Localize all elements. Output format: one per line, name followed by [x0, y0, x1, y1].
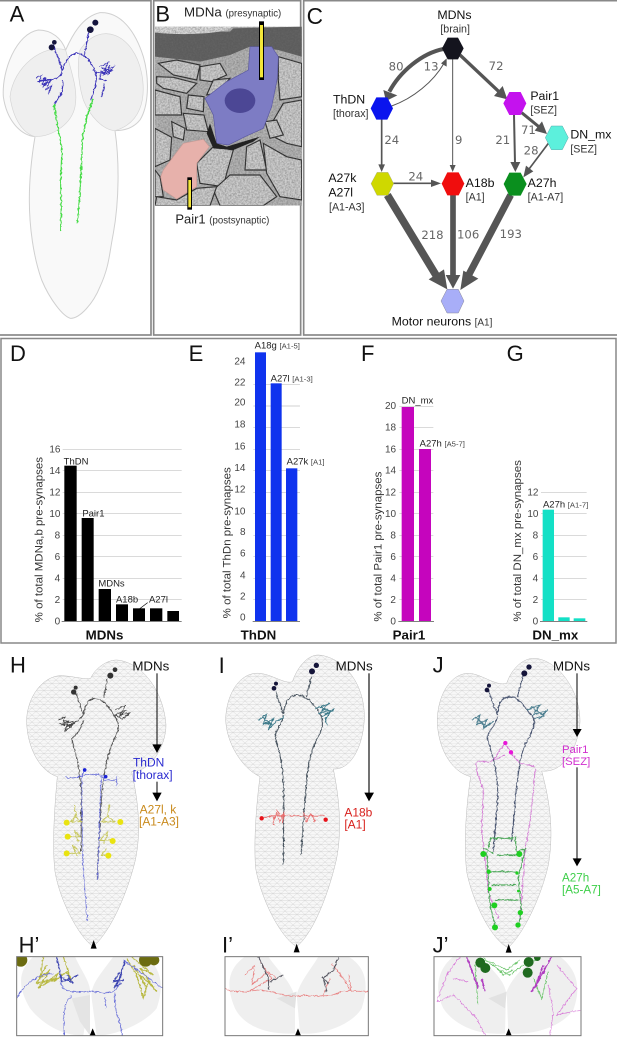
edge weights: 72	[489, 59, 504, 73]
edge: ThDN to A27k	[378, 119, 385, 172]
chart D: MDNs: D	[10, 341, 26, 366]
panel: J Pair1 and A27h pathway	[433, 652, 601, 1036]
node: A27k, A27l: A27k	[328, 171, 357, 185]
label: ThDN: [thorax]	[133, 768, 173, 782]
inset I'	[225, 957, 368, 1036]
chart D: MDNs: A27l	[149, 595, 168, 606]
arrow: ThDN to A27l,k	[152, 782, 162, 801]
nerve cord mesh	[437, 658, 580, 948]
A18b somata	[259, 816, 328, 822]
label: Pair1: [SEZ]	[562, 756, 590, 768]
heading: C: C	[307, 3, 323, 29]
chart G: DN_mx: A27h [A1-7]	[543, 499, 588, 510]
inset J'	[434, 954, 581, 1036]
label: A27h	[562, 872, 601, 897]
node: Pair1: Pair1	[530, 89, 559, 103]
nerve cord outline	[3, 13, 147, 318]
MDN cell bodies	[49, 20, 98, 50]
ThDN neuron (blue)	[65, 770, 117, 921]
MDN neuron: green axons	[54, 98, 93, 232]
node: Motor neurons	[392, 289, 493, 329]
dendrite tufts	[58, 706, 131, 731]
A18b neuron (red)	[262, 810, 325, 825]
panel: A whole-nerve-cord MDN morphology	[0, 1, 151, 335]
chart G: DN_mx	[507, 341, 588, 642]
arrow: MDNs to Pair1	[573, 673, 582, 737]
label: Pair1 postsynaptic: Pair1 (postsynaptic)	[175, 212, 269, 227]
heading: J': J’	[433, 932, 449, 957]
MDN somata	[272, 663, 319, 691]
label: A27h: A27h	[562, 872, 589, 885]
edge weights: 21	[495, 133, 510, 147]
label: A18b	[344, 806, 373, 831]
chart G: DN_mx: DN_mx	[532, 627, 579, 642]
chart E: ThDN: A18g [A1-5]	[255, 341, 300, 352]
midline marker	[294, 944, 300, 952]
edge: MDNs to ThDN	[383, 49, 443, 101]
edge: A18b to motor neurons	[446, 195, 460, 289]
chart D: MDNs: 0	[55, 616, 61, 627]
MDN somata	[71, 667, 117, 695]
chart F: Pair1: 14	[385, 466, 397, 477]
arrow: MDNs to ThDN	[152, 673, 162, 753]
chart D: MDNs: MDNs	[86, 627, 123, 642]
edge: A27k to A18b	[393, 180, 441, 187]
chart E: ThDN: 6	[240, 548, 246, 559]
Pair1 neuron (magenta)	[476, 743, 535, 922]
edge: Pair1 to A27h	[510, 115, 520, 172]
dendrite tufts	[472, 705, 547, 728]
chart F: Pair1: 8	[390, 530, 396, 541]
label: MDNs: MDNs	[553, 659, 590, 674]
nerve cord mesh	[226, 655, 364, 947]
chart F: Pair1: F	[361, 341, 374, 366]
heading: I': I’	[222, 932, 233, 957]
node: ThDN: [thorax]	[333, 108, 369, 120]
marker: MDNa yellow bar	[259, 21, 264, 80]
A27l,k neurons (yellow)	[67, 805, 115, 857]
label: A27l,k: [A1-A3]	[139, 814, 179, 828]
node: A27k, A27l	[328, 171, 394, 213]
MDN neuron: blue arbor	[36, 28, 114, 104]
chart E: ThDN: E	[189, 341, 203, 366]
chart F: Pair1: 2	[390, 595, 396, 606]
label: MDNa presynaptic: MDNa (presynaptic)	[184, 5, 281, 20]
midline marker	[91, 940, 97, 949]
node: MDNs: [brain]	[440, 24, 470, 36]
chart E: ThDN: 18	[234, 420, 246, 431]
chart E: ThDN: A27k [A1]	[287, 457, 325, 468]
node: A27h: [A1-A7]	[528, 191, 563, 203]
edge weights	[384, 59, 539, 242]
chart G: DN_mx: 2	[533, 595, 539, 606]
label: Pair1: Pair1	[562, 744, 588, 756]
node: ThDN	[333, 93, 393, 120]
lobe shading	[10, 34, 143, 137]
label: ThDN	[133, 755, 173, 782]
chart F: Pair1: 18	[385, 423, 397, 434]
panel: B electron micrograph	[154, 1, 302, 335]
label: Pair1	[562, 744, 590, 768]
node: ThDN: ThDN	[333, 93, 365, 107]
label: ThDN: ThDN	[133, 755, 164, 769]
chart E: ThDN: 2	[240, 592, 246, 603]
node: Motor neurons: Motor neurons [A1]	[392, 315, 493, 329]
chart G: DN_mx: % of total DN_mx pre-synapses	[512, 460, 524, 622]
edge weights: 106	[457, 227, 479, 241]
label: A18b: A18b	[344, 806, 373, 820]
chart F: Pair1: 10	[385, 509, 397, 520]
label: A27l,k	[139, 803, 179, 828]
chart F: Pair1	[361, 341, 465, 642]
synapse dark density	[207, 123, 260, 150]
nucleus	[225, 88, 255, 113]
arrow: Pair1 to A27h	[573, 767, 582, 866]
inset H'	[14, 953, 163, 1036]
node: A18b	[442, 172, 495, 203]
chart E: ThDN: A27l [A1-3]	[271, 373, 313, 384]
chart E: ThDN: 14	[234, 463, 246, 474]
heading: H': H’	[19, 932, 39, 957]
heading: B: B	[155, 1, 170, 26]
chart E: ThDN: 10	[234, 506, 246, 517]
chart D: MDNs: 2	[55, 595, 61, 606]
heading: H: H	[10, 652, 26, 677]
panel: bar charts D to G	[1, 338, 616, 643]
node: MDNs: MDNs	[437, 8, 472, 22]
label: MDNs: MDNs	[132, 659, 170, 674]
node: A27h: A27h	[528, 176, 557, 190]
label: MDNs: MDNs	[336, 659, 373, 674]
edge weights: 80	[389, 59, 404, 73]
edge weights: 9	[455, 133, 462, 147]
label: A27h: [A5-A7]	[562, 884, 601, 897]
edge: MDNs to Pair1	[460, 55, 507, 99]
edge: A27h to motor neurons	[460, 195, 511, 290]
chart F: Pair1: DN_mx	[402, 396, 434, 407]
chart F: Pair1: 0	[390, 616, 396, 627]
chart G: DN_mx: 8	[533, 530, 539, 541]
node: DN_mx: DN_mx	[570, 128, 612, 142]
chart D: MDNs: 16	[49, 445, 61, 456]
edge weights: 13	[424, 59, 439, 73]
chart F: Pair1: A27h [A5-7]	[420, 439, 465, 450]
chart D: MDNs: 12	[49, 488, 61, 499]
node: A27k, A27l: A27l	[328, 186, 353, 200]
ThDN somata	[83, 768, 107, 778]
chart E: ThDN: 4	[240, 570, 246, 581]
Pair1 cell (pink)	[161, 139, 209, 199]
chart E: ThDN: 22	[234, 378, 246, 389]
MDN somata	[485, 664, 532, 692]
chart E: ThDN: 8	[240, 527, 246, 538]
chart D: MDNs: MDNs	[98, 579, 125, 590]
node: MDNs	[437, 8, 472, 59]
chart E: ThDN: 16	[234, 442, 246, 453]
chart G: DN_mx: 4	[533, 574, 539, 585]
chart E: ThDN	[189, 341, 325, 642]
edge: ThDN to MDNs	[392, 58, 447, 106]
node: A27k, A27l: [A1-A3]	[329, 201, 365, 213]
chart F: Pair1: 4	[390, 574, 396, 585]
nerve cord mesh	[27, 660, 166, 947]
chart F: Pair1: Pair1	[393, 627, 426, 642]
A27l,k somata	[64, 819, 123, 859]
edge weights: 28	[524, 143, 539, 157]
chart D: MDNs: A18b	[116, 595, 138, 606]
heading: J: J	[433, 652, 444, 677]
arrow: MDNs to A18b	[364, 673, 374, 801]
chart D: MDNs: Pair1	[82, 509, 104, 520]
marker: Pair1 yellow bar	[187, 177, 192, 210]
panel: I A18b pathway	[219, 653, 374, 1036]
chart D: MDNs	[10, 341, 182, 642]
MDN neurons (dark)	[63, 678, 119, 880]
chart F: Pair1: 6	[390, 552, 396, 563]
node: Pair1	[503, 89, 559, 117]
midline marker	[506, 944, 512, 953]
chart E: ThDN: ThDN	[241, 627, 276, 642]
chart E: ThDN: 12	[234, 484, 246, 495]
A27h neurons (green)	[483, 837, 527, 925]
MDN neurons (dark)	[275, 677, 322, 865]
chart F: Pair1: 16	[385, 444, 397, 455]
chart G: DN_mx: 0	[533, 616, 539, 627]
node: DN_mx	[545, 126, 612, 155]
chart F: Pair1: 12	[385, 487, 397, 498]
chart D: MDNs: 14	[49, 466, 61, 477]
chart G: DN_mx: G	[507, 341, 524, 366]
chart D: MDNs: ThDN	[64, 457, 89, 468]
label: A27l,k: A27l, k	[140, 803, 177, 817]
node: A18b: [A1]	[466, 191, 485, 203]
EM image	[155, 27, 302, 206]
edge weights: 218	[421, 228, 444, 242]
chart E: ThDN: 20	[234, 398, 246, 409]
edge weights: 193	[500, 227, 522, 241]
chart G: DN_mx: 12	[527, 487, 539, 498]
heading: A: A	[10, 1, 25, 26]
chart D: MDNs: % of total MDNa,b pre-synapses	[33, 457, 45, 622]
Pair1 somata	[503, 741, 513, 754]
panel: H ThDN and A27l,k pathway	[10, 652, 179, 1036]
edge weights: 24	[408, 169, 423, 183]
chart D: MDNs: 8	[55, 531, 61, 542]
node: A27h	[504, 173, 563, 203]
panel: C connectivity network	[304, 1, 617, 335]
chart D: MDNs: 10	[49, 509, 61, 520]
MDNa cell (purple)	[205, 47, 278, 145]
chart E: ThDN: % of total ThDn pre-synapses	[221, 467, 233, 618]
MDN neurons (dark)	[488, 675, 534, 852]
chart F: Pair1: % of total Pair1 pre-synapses	[373, 471, 385, 622]
chart E: ThDN: 24	[234, 356, 246, 367]
chart D: MDNs: 6	[55, 552, 61, 563]
edge: DN_mx to A27h	[523, 143, 548, 177]
node: Pair1: [SEZ]	[530, 105, 557, 117]
chart E: ThDN: 0	[240, 612, 246, 623]
edge weights: 71	[521, 123, 536, 137]
edge: MDNs to A18b	[450, 58, 456, 172]
heading: I: I	[219, 653, 225, 678]
edge: A27k to motor neurons	[387, 195, 447, 289]
node: DN_mx: [SEZ]	[570, 143, 597, 155]
dendrite tufts	[259, 704, 333, 730]
edges	[378, 49, 548, 290]
label: A18b: [A1]	[344, 817, 366, 831]
chart D: MDNs: 4	[55, 574, 61, 585]
edge weights: 24	[384, 133, 399, 147]
A27h somata	[480, 851, 523, 930]
chart G: DN_mx: 6	[533, 552, 539, 563]
chart F: Pair1: 20	[385, 401, 397, 412]
node: A18b: A18b	[466, 176, 495, 190]
chart G: DN_mx: 10	[527, 509, 539, 520]
edge: Pair1 to DN_mx	[522, 113, 547, 134]
